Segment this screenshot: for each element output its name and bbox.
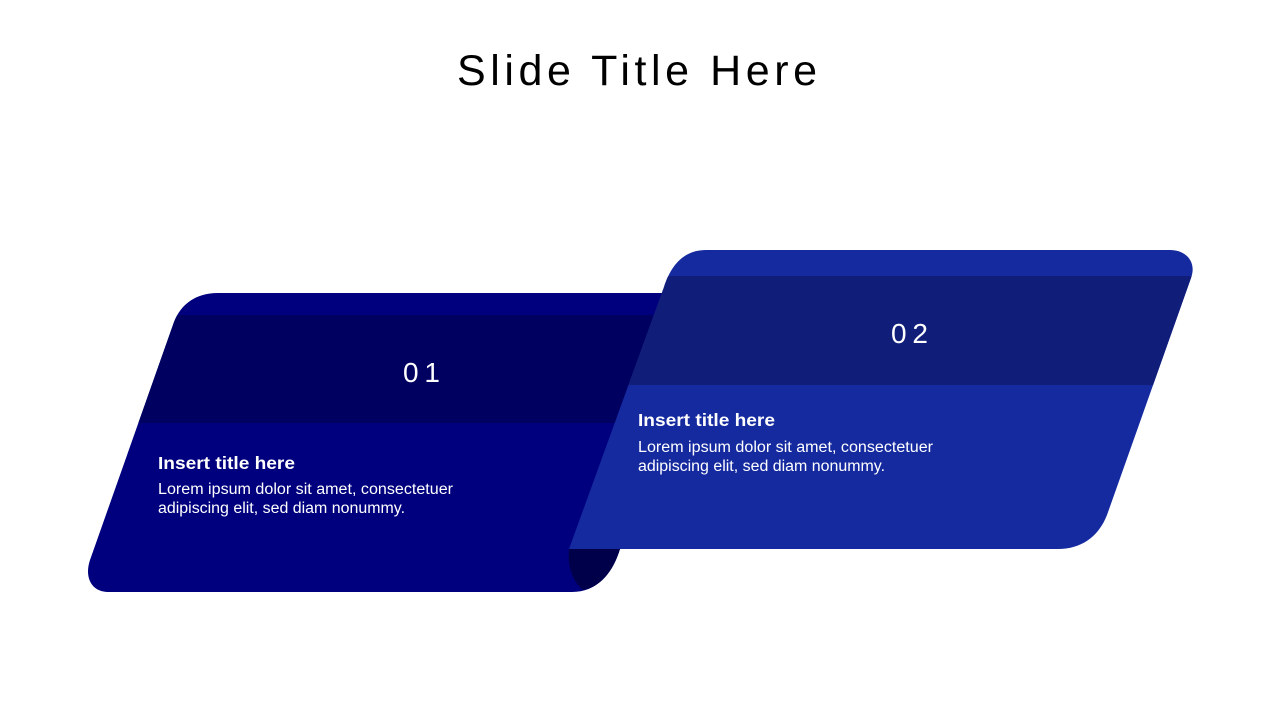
- panel 01 text: adipiscing elit, sed diam nonummy.: [158, 500, 405, 517]
- panel: step 01: [88, 293, 700, 592]
- panel 02 body: [569, 250, 1193, 549]
- panel 01 curl: [569, 549, 620, 590]
- panel 01 heading: Insert title here: [158, 453, 295, 473]
- number 01: 01: [403, 357, 440, 388]
- number 02: 02: [891, 318, 928, 349]
- panel: step 02: [569, 250, 1200, 549]
- panel 01 body: [88, 293, 700, 592]
- panel 02 heading: Insert title here: [638, 410, 775, 430]
- panel 02 text: Lorem ipsum dolor sit amet, consectetuer: [638, 439, 933, 456]
- panel 02 text: [638, 439, 933, 475]
- panel 01 text: [158, 481, 453, 517]
- panel 01 header band: [130, 315, 680, 423]
- title: Slide Title Here: [457, 47, 817, 95]
- panel 02 text: adipiscing elit, sed diam nonummy.: [638, 458, 885, 475]
- panel 02 header band: [620, 276, 1200, 385]
- panel 01 text: Lorem ipsum dolor sit amet, consectetuer: [158, 481, 453, 498]
